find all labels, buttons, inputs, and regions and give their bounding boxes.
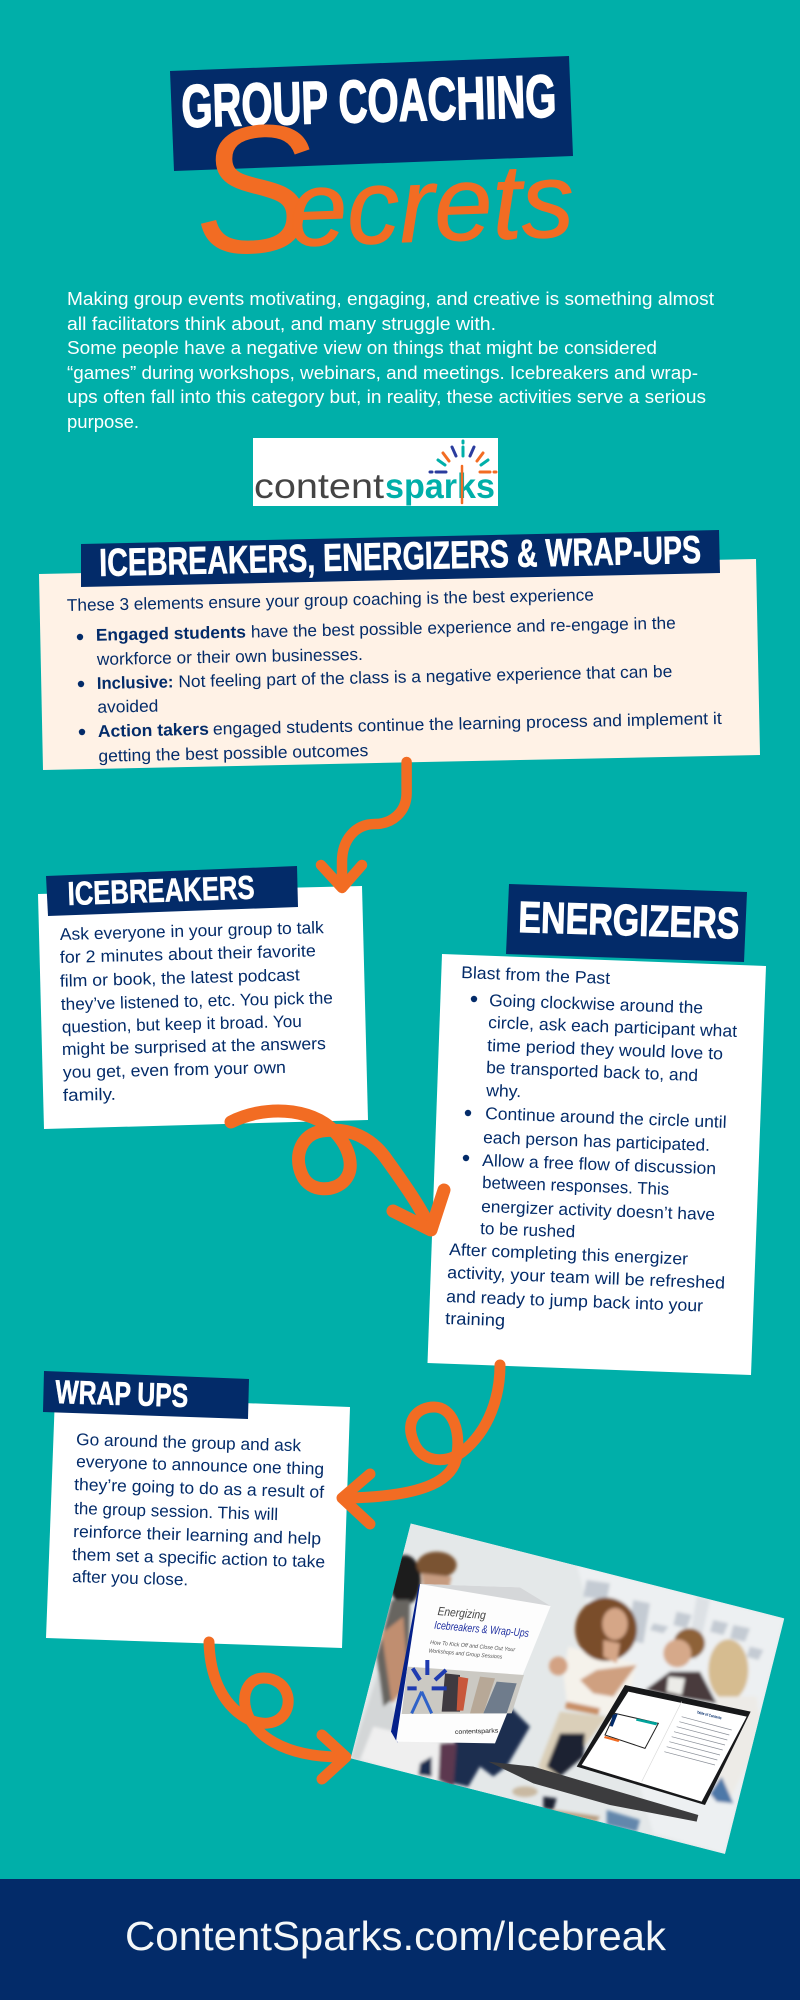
logo: contentsparks: sparks [385, 467, 495, 506]
icebreakers heading banner: ICEBREAKERS [67, 868, 255, 912]
energizers bullet list: why. [485, 1081, 522, 1101]
ebook cover: Workshops and Group Sessions [428, 1648, 503, 1661]
icebreakers body text: Ask everyone in your group to talk [60, 918, 325, 944]
overview intro line: These 3 elements ensure your group coaching is the best experience [67, 585, 594, 615]
logo: contentsparks: content [254, 467, 384, 506]
icebreakers body text: they’ve listened to, etc. You pick the [61, 988, 333, 1014]
logo: contentsparks [253, 438, 498, 506]
laptop: Table of Contents [696, 1709, 723, 1721]
wrap ups body text: everyone to announce one thing [76, 1452, 324, 1479]
overview bullet list: Action takers [98, 720, 209, 741]
footer bar with URL [0, 1879, 800, 2000]
wrap ups body text: the group session. This will [74, 1499, 278, 1524]
ebook cover: contentsparks [455, 1727, 498, 1736]
energizers bullet list: Going clockwise around the [489, 991, 703, 1017]
icebreakers body text [60, 918, 333, 1105]
energizers bullet list: Continue around the circle until [485, 1104, 727, 1132]
icebreakers body text: film or book, the latest podcast [60, 965, 300, 991]
title script: Secrets [191, 85, 576, 293]
wrap ups body text: Go around the group and ask [76, 1430, 302, 1455]
ebook cover: Icebreakers & Wrap-Ups [434, 1620, 530, 1640]
wrap ups body text [72, 1430, 325, 1589]
energizers bullet list: time period they would love to [487, 1036, 723, 1063]
overview bullet list: Engaged students [96, 623, 246, 645]
energizers closing text: activity, your team will be refreshed [447, 1263, 725, 1293]
energizers bullet list: to be rushed [480, 1219, 575, 1241]
intro paragraph: all facilitators think about, and many struggle with. [67, 313, 496, 334]
panel: icebreakers [38, 866, 368, 1129]
intro paragraph: “games” during workshops, webinars, and meetings. Icebreakers and wrap- [67, 362, 698, 383]
panel: wrap ups [43, 1371, 350, 1648]
energizers closing text: and ready to jump back into your [446, 1287, 704, 1315]
energizers bullet list: energizer activity doesn’t have [481, 1197, 715, 1224]
energizers bullet list: between responses. This [482, 1173, 669, 1199]
icebreakers body text: might be surprised at the answers [62, 1034, 326, 1059]
energizers heading banner: ENERGIZERS [518, 893, 740, 949]
arrow: energizers to wrap ups [342, 1365, 500, 1524]
title banner: Group Coaching: GROUP COACHING [180, 63, 557, 140]
panel: energizers [428, 884, 766, 1375]
overview bullet list: avoided [97, 697, 159, 717]
arrow: icebreakers to energizers [231, 1111, 444, 1230]
arrow: overview to icebreakers [321, 762, 407, 888]
intro paragraph [67, 288, 714, 432]
overview bullet list: workforce or their own businesses. [96, 645, 363, 669]
energizers closing text: After completing this energizer [449, 1240, 689, 1269]
energizers closing text: training [445, 1309, 505, 1330]
wrap ups heading banner: WRAP UPS [55, 1373, 189, 1414]
photo: workshop group with ebook and laptop [351, 1523, 784, 1854]
overview bullet list [77, 614, 722, 766]
energizers subtitle: Blast from the Past [461, 963, 611, 988]
overview bullet list: Not feeling part of the class is a negative experience that can be [178, 662, 672, 691]
intro paragraph: Making group events motivating, engaging, and creative is something almost [67, 288, 714, 309]
ebook cover [391, 1584, 551, 1743]
ebook cover: Energizing [437, 1604, 487, 1622]
energizers bullet list [463, 991, 738, 1241]
ebook cover: How To Kick Off and Close Out Your [430, 1640, 516, 1654]
panel: icebreakers, energizers and wrap-ups overview [39, 529, 760, 770]
icebreakers body text: for 2 minutes about their favorite [60, 941, 316, 967]
overview bullet list: engaged students continue the learning process and implement it [213, 709, 722, 739]
footer bar with URL: ContentSparks.com/Icebreak [125, 1913, 667, 1959]
background windows and people [351, 1552, 784, 1854]
energizers bullet list: each person has participated. [483, 1128, 710, 1155]
overview bullet list: Inclusive: [97, 672, 174, 693]
overview bullet list: have the best possible experience and re-engage in the [251, 614, 676, 641]
arrow: wrap ups to product photo [209, 1642, 346, 1779]
energizers heading banner [506, 884, 747, 962]
title script: Secrets: S [191, 85, 316, 293]
title script: Secrets: ecrets [287, 141, 576, 269]
intro paragraph: ups often fall into this category but, in reality, these activities serve a serious [67, 386, 706, 407]
icebreakers body text: you get, even from your own [63, 1058, 286, 1082]
intro paragraph: purpose. [67, 411, 139, 432]
intro paragraph: Some people have a negative view on things that might be considered [67, 337, 657, 358]
energizers closing text [445, 1240, 725, 1330]
overview bullet list: getting the best possible outcomes [98, 741, 369, 766]
energizers bullet list: Allow a free flow of discussion [482, 1151, 716, 1178]
laptop [488, 1685, 751, 1822]
wrap ups body text: reinforce their learning and help [73, 1522, 321, 1548]
wrap ups body text: them set a specific action to take [72, 1545, 325, 1572]
energizers bullet list: be transported back to, and [486, 1058, 698, 1085]
wrap ups body text: they’re going to do as a result of [74, 1475, 325, 1502]
icebreakers body text: question, but keep it broad. You [62, 1012, 302, 1037]
icebreakers body text: family. [63, 1085, 116, 1105]
title banner: Group Coaching [170, 56, 573, 171]
wrap ups body text: after you close. [72, 1567, 188, 1589]
energizers bullet list: circle, ask each participant what [488, 1013, 738, 1041]
